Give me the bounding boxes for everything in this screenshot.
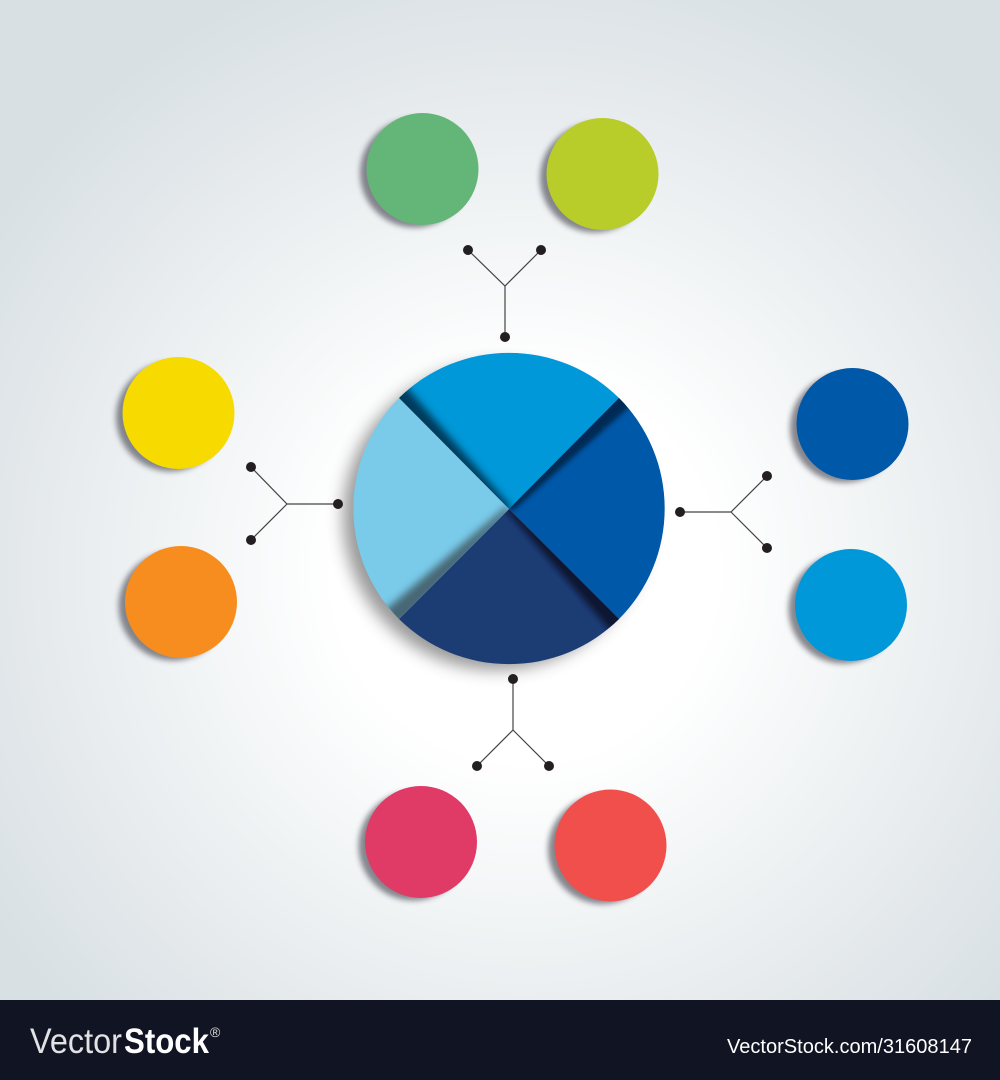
- circle: lime: [540, 118, 658, 232]
- connector: bottom: [472, 674, 554, 771]
- pie segment: bottom: [399, 505, 630, 664]
- footer image id: VectorStock.com/31608147: [727, 1036, 972, 1058]
- footer registered mark: ®: [210, 1024, 221, 1040]
- connector: right: [675, 471, 772, 553]
- pie segment: right: [505, 390, 665, 619]
- circle: pink: [358, 786, 477, 900]
- footer logo: Stock: [124, 1022, 209, 1061]
- circle: red: [548, 790, 666, 904]
- circle: orange: [118, 546, 237, 660]
- connector: left: [246, 462, 343, 545]
- central pie chart: [343, 353, 665, 670]
- circle: dark blue: [790, 368, 908, 482]
- footer bar: [0, 1000, 1000, 1080]
- footer logo: Vector: [30, 1022, 122, 1061]
- pie segment: top: [399, 352, 619, 509]
- footer logo: [30, 1022, 209, 1061]
- circle: sky blue: [788, 549, 907, 664]
- circle: green: [360, 113, 478, 228]
- connector: top: [463, 245, 546, 342]
- pie segment: left: [353, 398, 511, 632]
- circle: yellow: [116, 357, 234, 472]
